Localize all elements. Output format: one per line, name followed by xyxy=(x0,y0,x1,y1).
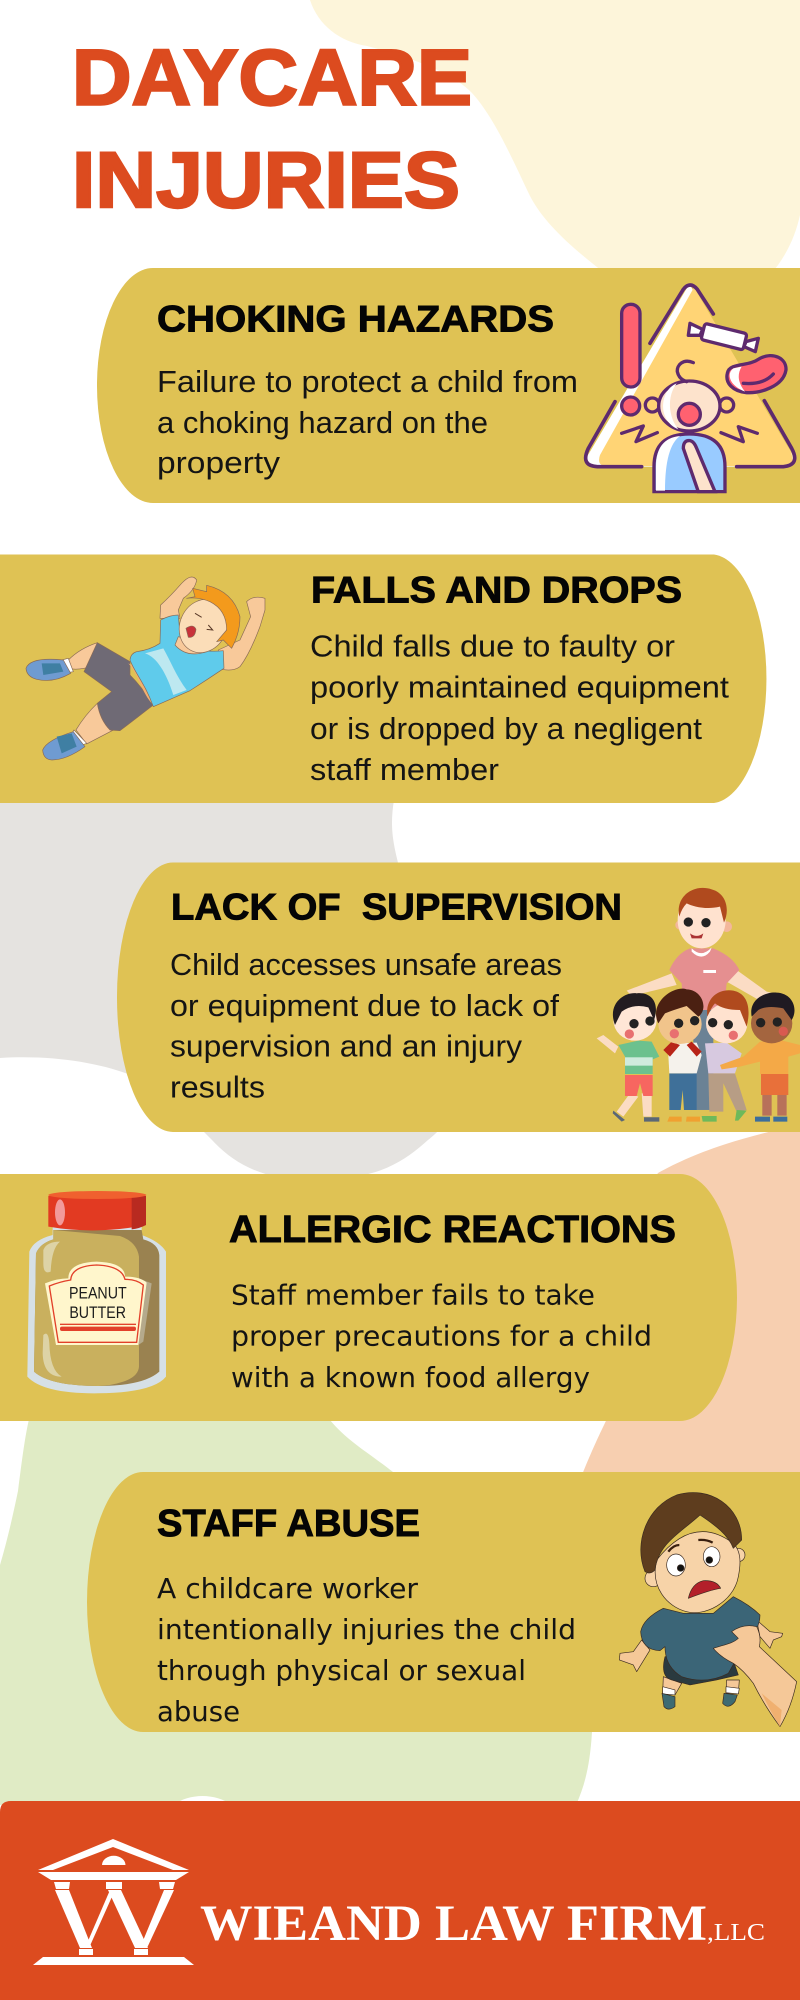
child three xyxy=(702,990,749,1122)
icon: teacher with four children xyxy=(597,888,800,1122)
text: staff abuse description xyxy=(157,1572,576,1728)
text: staff abuse description: abuse xyxy=(157,1695,240,1728)
label text: peanut butter: BUTTER xyxy=(69,1303,126,1322)
text: lack of supervision description xyxy=(170,947,562,1104)
text: falls and drops description: poorly maintained equipment xyxy=(310,670,729,704)
text: choking hazards description: property xyxy=(157,445,281,480)
logo wordmark: WIEAND LAW FIRM xyxy=(200,1896,707,1952)
panel: falls and drops xyxy=(0,554,766,803)
panel: staff abuse xyxy=(87,1472,800,1732)
text: staff abuse description: A childcare worker xyxy=(157,1572,418,1605)
text: falls and drops description xyxy=(310,628,729,787)
child one xyxy=(597,993,659,1122)
label text: peanut butter xyxy=(69,1283,127,1322)
heading: staff abuse: STAFF ABUSE xyxy=(157,1503,420,1545)
text: allergic reactions description: Staff member fails to take xyxy=(231,1278,595,1312)
footer banner xyxy=(0,1801,800,2000)
text: falls and drops description: Child falls due to faulty or xyxy=(310,628,675,664)
text: staff abuse description: intentionally injuries the child xyxy=(157,1613,576,1646)
text: allergic reactions description xyxy=(231,1278,652,1394)
text: lack of supervision description: Child accesses unsafe areas xyxy=(170,947,562,982)
icon: peanut butter jar xyxy=(27,1191,166,1393)
child two xyxy=(656,989,703,1122)
text: falls and drops description: or is dropped by a negligent xyxy=(310,711,702,746)
text: falls and drops description: staff member xyxy=(310,752,499,787)
panel: lack of supervision xyxy=(117,862,800,1132)
heading: falls and drops: FALLS AND DROPS xyxy=(311,570,682,610)
text: lack of supervision description: results xyxy=(170,1070,265,1104)
text: lack of supervision description: supervision and an injury xyxy=(170,1028,522,1064)
logo: courthouse W xyxy=(33,1839,194,1965)
text: allergic reactions description: with a known food allergy xyxy=(231,1361,590,1394)
logo wordmark: ,LLC xyxy=(707,1920,765,1946)
icon: choking baby warning triangle xyxy=(586,284,795,492)
title: DAYCARE xyxy=(72,32,472,122)
title: INJURIES xyxy=(72,135,460,224)
icon: frightened boy grabbed by adult hand xyxy=(619,1493,797,1727)
panel: choking hazards xyxy=(97,268,800,503)
text: allergic reactions description: proper precautions for a child xyxy=(231,1320,652,1352)
icon: falling boy xyxy=(26,577,265,760)
text: choking hazards description xyxy=(157,364,578,480)
text: choking hazards description: a choking hazard on the xyxy=(157,405,488,440)
child four xyxy=(720,993,800,1122)
heading: choking hazards: CHOKING HAZARDS xyxy=(157,298,554,340)
teacher xyxy=(627,888,780,1110)
heading: allergic reactions: ALLERGIC REACTIONS xyxy=(229,1209,676,1251)
text: choking hazards description: Failure to protect a child from xyxy=(157,364,578,399)
panel: allergic reactions xyxy=(0,1174,737,1421)
heading: lack of supervision: LACK OF SUPERVISION xyxy=(171,886,622,928)
text: staff abuse description: through physical or sexual xyxy=(157,1654,526,1687)
text: lack of supervision description: or equipment due to lack of xyxy=(170,988,559,1023)
label text: peanut butter: PEANUT xyxy=(69,1283,127,1302)
title xyxy=(72,32,472,224)
